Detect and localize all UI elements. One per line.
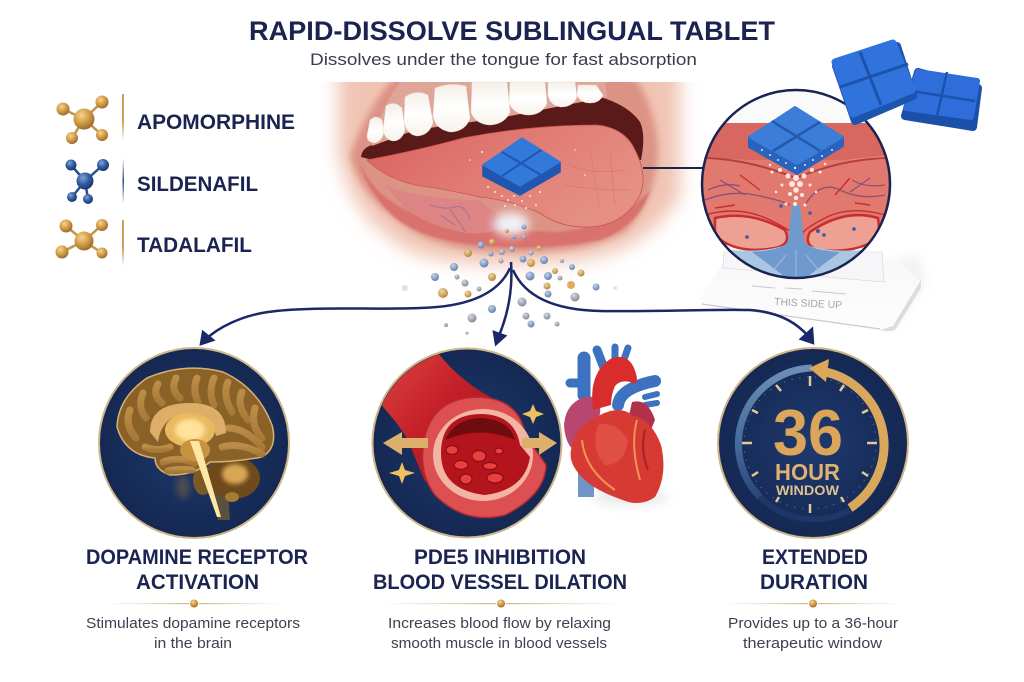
divider with dot <box>730 598 896 608</box>
lips <box>350 70 658 253</box>
heading: ACTIVATION <box>136 571 259 594</box>
tablet: front <box>835 43 913 121</box>
clock arc: gold <box>820 371 884 508</box>
tongue <box>367 125 643 227</box>
vessel wall <box>422 397 546 518</box>
upper gum <box>372 82 607 146</box>
facial skin <box>338 65 680 265</box>
blood vessels <box>705 178 885 205</box>
vessel tube <box>382 354 492 482</box>
icon: apomorphine molecule <box>56 96 108 144</box>
capillary lobes <box>715 216 787 250</box>
teeth <box>367 82 603 143</box>
connector line: tongue to magnified view <box>643 167 703 169</box>
heart vessels <box>570 347 657 497</box>
panel: duration caption <box>728 546 898 652</box>
icon: brain cortex <box>117 368 274 475</box>
minor clock ticks <box>744 377 876 509</box>
tray label: THIS SIDE UP <box>774 296 842 312</box>
illustration: heart <box>564 347 668 506</box>
description <box>86 615 300 652</box>
panel: dopamine caption <box>86 546 308 652</box>
icon: tadalafil molecule <box>56 219 108 258</box>
panel: blood vessel <box>372 345 562 538</box>
title: RAPID-DISSOLVE SUBLINGUAL TABLET <box>249 16 776 46</box>
glow behind brain <box>176 475 190 499</box>
arrows: absorption pathways <box>201 262 813 344</box>
divider with dot <box>112 598 277 608</box>
tablet: rear <box>905 72 978 127</box>
label: sildenafil: SILDENAFIL <box>137 173 258 196</box>
divider: sildenafil <box>122 158 124 204</box>
illustration: packaging tray <box>700 252 925 332</box>
lip vein detail <box>430 205 470 232</box>
illustration: open mouth with tablet on tongue <box>338 65 680 265</box>
dissolved particles <box>769 163 826 206</box>
arrow: to dopamine receptor <box>201 268 510 344</box>
clock arrowhead <box>809 359 829 382</box>
icon: sildenafil molecule <box>66 159 109 204</box>
magnified tablet <box>749 137 843 174</box>
tablet on tongue <box>483 138 560 195</box>
description <box>728 615 898 652</box>
clock window label: WINDOW <box>776 483 839 498</box>
panel: brain <box>99 348 289 538</box>
tongue texture <box>565 150 630 210</box>
dissolving powder glow <box>493 212 529 236</box>
mouth cavity <box>361 98 644 160</box>
arrow: to extended duration <box>513 270 813 343</box>
description: Increases blood flow by relaxing <box>388 615 611 632</box>
lower blue zone <box>731 246 861 276</box>
arrow: dilation left <box>383 432 428 455</box>
arrow: to PDE5 inhibition <box>494 262 511 344</box>
divider: apomorphine <box>122 94 124 140</box>
heading: DOPAMINE RECEPTOR <box>86 546 308 569</box>
icon: sparkle top <box>522 404 544 424</box>
panel: PDE5 caption <box>373 546 627 652</box>
arrow: dilation right <box>522 432 557 455</box>
description <box>388 615 611 652</box>
clock arc: faded lower <box>760 497 850 519</box>
heading: EXTENDED <box>762 546 868 569</box>
description: therapeutic window <box>743 635 882 652</box>
clock ticks <box>742 376 877 513</box>
particles dispersing from tongue <box>402 224 617 334</box>
panel: magnified sublingual absorption <box>700 90 892 285</box>
heading: BLOOD VESSEL DILATION <box>373 571 627 594</box>
label: apomorphine: APOMORPHINE <box>137 111 295 134</box>
aorta <box>592 357 637 410</box>
clock hour label: HOUR <box>775 459 840 485</box>
divider with dot <box>389 598 614 608</box>
red blood cells <box>446 446 503 484</box>
heart ventricles <box>571 410 663 503</box>
tongue powder specks <box>469 149 586 209</box>
description: in the brain <box>154 635 232 652</box>
lumen <box>441 414 530 495</box>
panel: active ingredient list <box>56 94 295 266</box>
icon: brain stem and cerebellum <box>193 457 260 520</box>
label: tadalafil: TADALAFIL <box>137 234 252 257</box>
divider: tadalafil <box>122 220 124 266</box>
heading <box>86 546 308 594</box>
description: Stimulates dopamine receptors <box>86 615 300 632</box>
panel: 36-hour clock <box>718 348 908 538</box>
clock number: 36 <box>773 396 843 469</box>
description: Provides up to a 36-hour <box>728 615 898 632</box>
heading <box>373 546 627 594</box>
description: smooth muscle in blood vessels <box>391 635 607 652</box>
subtitle: Dissolves under the tongue for fast absorption <box>310 50 697 69</box>
heart atrium <box>564 396 600 452</box>
icon: glowing dopamine pathway <box>165 413 221 517</box>
heading: DURATION <box>760 571 868 594</box>
icon: sparkle bottom <box>389 462 415 484</box>
heading <box>760 546 868 594</box>
illustration: loose blue tablets <box>835 43 978 127</box>
clock arc: elapsed <box>738 368 812 497</box>
heading: PDE5 INHIBITION <box>414 546 586 569</box>
lower lip <box>358 160 650 248</box>
